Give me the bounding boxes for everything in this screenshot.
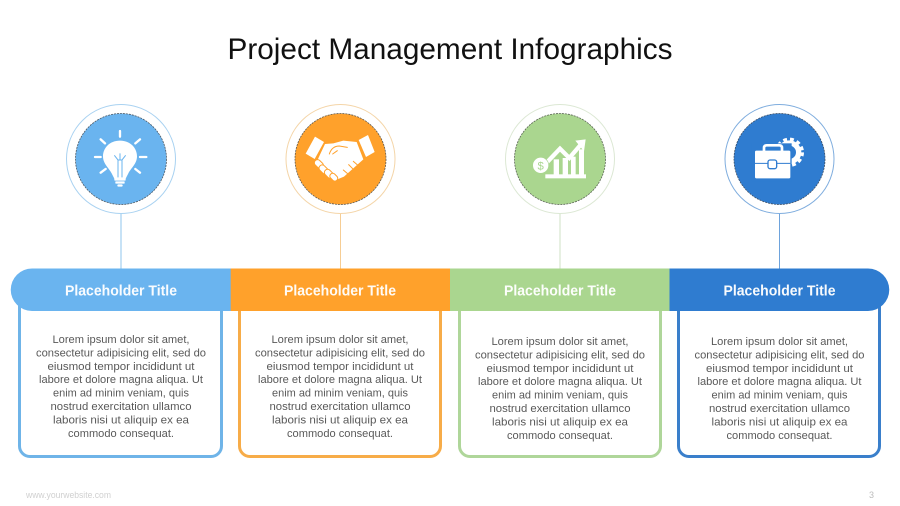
text block 4: enim ad minim veniam, quis [712,390,848,402]
text block 3: consectetur adipisicing elit, sed do [475,349,645,361]
text block 1: consectetur adipisicing elit, sed do [36,347,206,359]
panel: card 2 outline [240,305,440,456]
text block 4: laboris nisi ut aliquip ex ea [712,416,848,428]
text block 2: eiusmod tempor incididunt ut [266,361,414,373]
panel: step 3 circle and connector [506,104,614,269]
text block 3: nostrud exercitation ullamco [490,403,630,415]
text block 3: commodo consequat. [507,430,613,442]
header bar segment 2 [231,268,450,311]
text block 2: enim ad minim veniam, quis [272,388,408,400]
text block 3: laboris nisi ut aliquip ex ea [492,416,629,428]
text block 2: consectetur adipisicing elit, sed do [255,347,425,359]
text block 2: labore et dolore magna aliqua. Ut [258,374,422,386]
text block 1: nostrud exercitation ullamco [50,401,192,413]
text block 4: Lorem ipsum dolor sit amet, [711,336,848,348]
header bar segment 1 [11,268,231,311]
text block 4 [694,336,864,442]
icon: briefcase with gear [752,140,802,182]
text block 1: laboris nisi ut aliquip ex ea [53,414,190,426]
panel: card 1 outline [20,305,222,456]
text block 2: Lorem ipsum dolor sit amet, [272,334,408,346]
text block 3 [475,336,645,442]
header bar segment 4 [670,268,889,311]
panel: step 2 circle and connector [286,104,395,269]
text block 2: laboris nisi ut aliquip ex ea [272,414,409,426]
text block 4: nostrud exercitation ullamco [709,403,850,415]
panel: step 1 circle and connector [66,104,176,269]
heading 1: Placeholder Title [65,284,177,300]
text block 4: consectetur adipisicing elit, sed do [694,349,864,361]
text block 1: eiusmod tempor incididunt ut [48,361,194,373]
footer website: www.yourwebsite.com [25,490,111,500]
text block 2: commodo consequat. [287,428,393,440]
text block 1: Lorem ipsum dolor sit amet, [52,334,189,346]
panel: card 3 outline [460,305,660,456]
header bar segment 3 [450,268,670,311]
page number: 3 [869,490,874,500]
text block 4: commodo consequat. [726,430,832,442]
icon: growth chart with coin: $ [538,161,545,173]
text block 4: eiusmod tempor incididunt ut [706,363,853,375]
heading 2: Placeholder Title [284,284,396,300]
text block 3: enim ad minim veniam, quis [492,390,628,402]
heading 3: Placeholder Title [504,284,616,300]
title: Project Management Infographics [228,33,672,66]
text block 1: labore et dolore magna aliqua. Ut [39,374,203,386]
text block 1: commodo consequat. [68,428,174,440]
panel: card 4 outline [678,305,880,456]
text block 3: Lorem ipsum dolor sit amet, [492,336,628,348]
text block 3: eiusmod tempor incididunt ut [486,363,634,375]
text block 3: labore et dolore magna aliqua. Ut [478,376,642,388]
text block 2 [255,334,425,440]
text block 4: labore et dolore magna aliqua. Ut [698,376,862,388]
icon: growth chart with coin [533,139,586,178]
text block 1 [36,334,206,440]
heading 4: Placeholder Title [724,284,836,300]
icon: light bulb [95,131,146,187]
text block 1: enim ad minim veniam, quis [53,388,189,400]
panel: step 4 circle and connector [725,104,834,269]
icon: handshake [306,135,375,182]
text block 2: nostrud exercitation ullamco [270,401,410,413]
